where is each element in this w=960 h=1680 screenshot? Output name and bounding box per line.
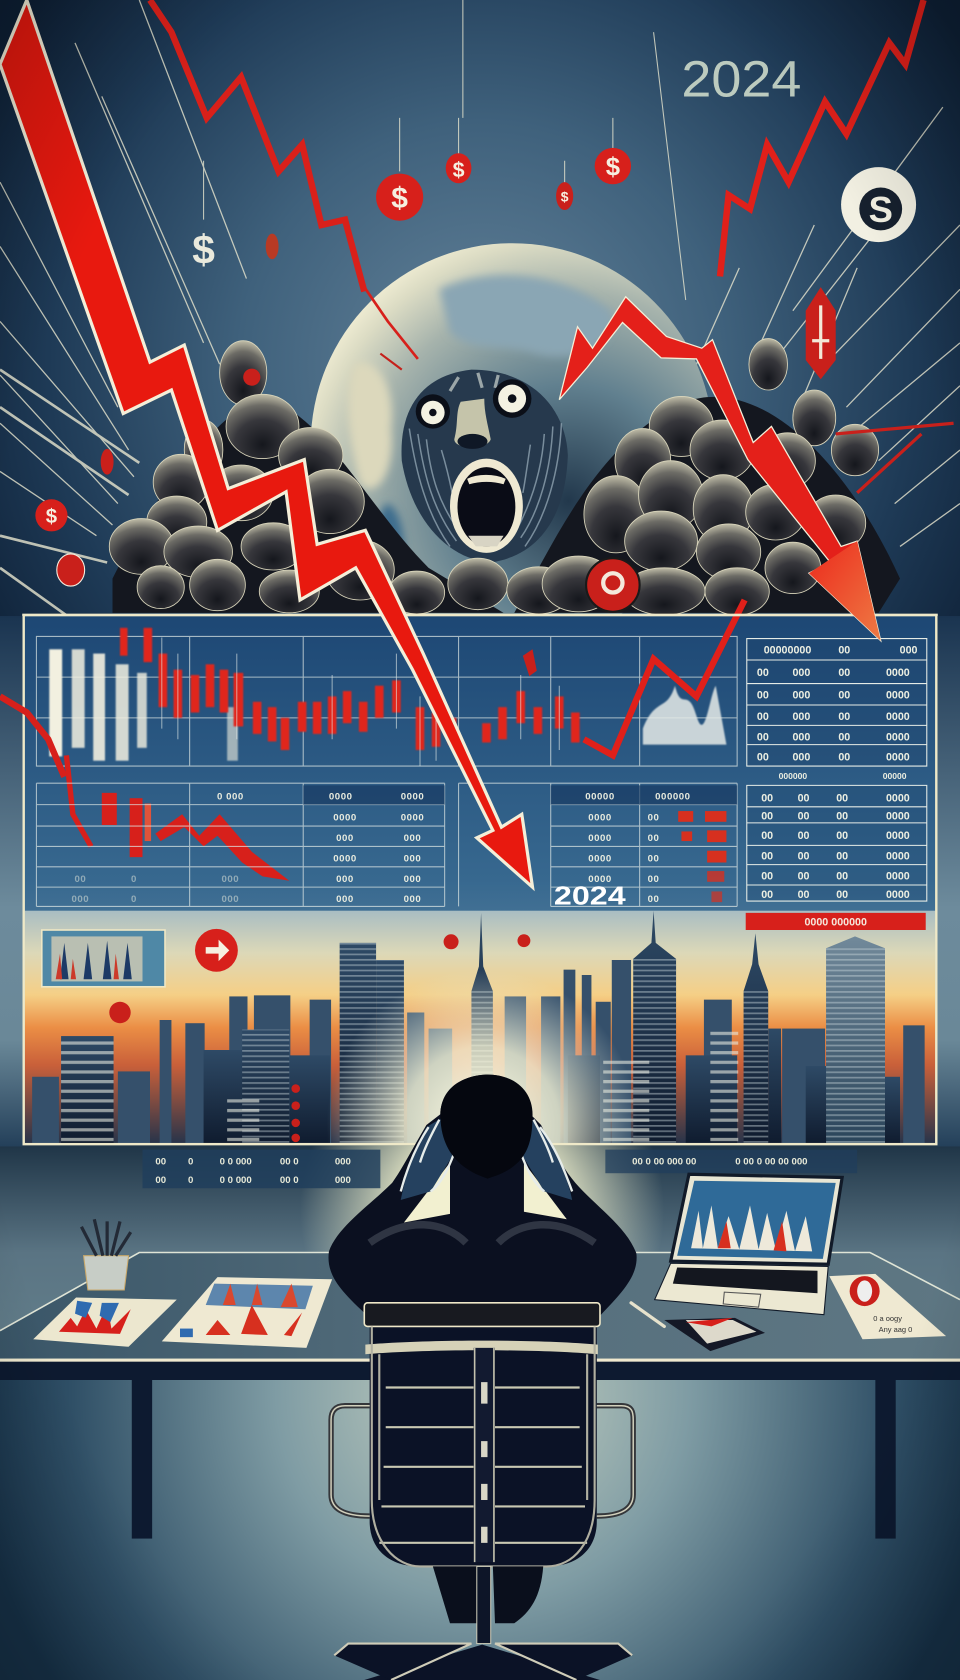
table cell values: 00 [648, 894, 659, 905]
table cell values: 0000 [588, 853, 612, 864]
table cell values [72, 791, 691, 905]
right table bottom: 00 [761, 792, 773, 804]
table cell values: 0 000 [217, 791, 244, 802]
panel year label: 2024 [554, 882, 627, 910]
right table top: 00 [838, 731, 850, 743]
right table top: 0000 [886, 690, 910, 702]
table cell values: 0000 [329, 791, 352, 802]
gap between left arm and neck [404, 1162, 450, 1222]
desk legs [132, 1380, 896, 1539]
chair slats [379, 1388, 587, 1543]
right table bottom: 00 [798, 830, 810, 842]
table cell values: 0000 [333, 813, 357, 824]
chair base struts [334, 1644, 632, 1680]
table cell values: 0000 [401, 791, 424, 802]
chair side frames [372, 1326, 595, 1566]
right forearm and hand [521, 1114, 572, 1200]
data table lower left [36, 783, 445, 906]
paper: red stamp note: 0 a oogy [873, 1314, 902, 1323]
right table bottom: 00 [761, 811, 773, 823]
coin [266, 234, 279, 259]
ticker strip below skyline: 00 0 [280, 1175, 299, 1186]
right side red streak [836, 423, 954, 493]
coin: $ [391, 182, 408, 215]
thin crack in moon [364, 287, 418, 359]
ticker strip below skyline: 00 0 00 000 00 [632, 1157, 696, 1168]
red tag on chart [523, 649, 537, 676]
ticker strip below skyline: 0 [188, 1175, 193, 1186]
red status bar [746, 913, 926, 930]
background sky [0, 0, 960, 616]
table cell values: 000 [72, 894, 89, 905]
chair arm highlights [331, 1406, 633, 1516]
nose [454, 399, 491, 447]
ticker strip below skyline [142, 1150, 857, 1188]
table cell values: 00 [648, 813, 659, 824]
right table top: 00 [757, 667, 769, 679]
paper: charts report [162, 1277, 332, 1348]
table cell values: 000 [336, 894, 354, 905]
white dollar: $ [192, 227, 215, 273]
table cell values: 0000 [588, 813, 612, 824]
right table top: 0000 [886, 731, 910, 743]
side stripes of panel [0, 616, 960, 1146]
hair [440, 1075, 533, 1179]
wide stripes [61, 1029, 738, 1144]
small skyline badges [109, 934, 530, 1023]
laptop [655, 1174, 842, 1315]
paper: red stamp note: Any aag 0 [879, 1325, 912, 1334]
coin [556, 182, 573, 210]
paper: red stamp note [829, 1274, 946, 1339]
table cell values: 0000 [588, 833, 612, 844]
coin [446, 153, 471, 183]
second red crash arrow [559, 297, 881, 641]
large white coin: S [869, 189, 893, 230]
right table top: 00000000 [764, 645, 811, 657]
coin [376, 174, 423, 221]
table cell values: 0000 [588, 874, 612, 885]
right table top: 00 [757, 690, 769, 702]
falling dollar coins [35, 148, 916, 612]
right table bottom: 00 [761, 889, 773, 901]
right table top: 00 [757, 711, 769, 723]
coin: $ [46, 506, 58, 528]
right table bottom: 00 [836, 850, 848, 862]
eye left [416, 394, 450, 429]
far buildings [32, 960, 925, 1144]
large red crash arrow [0, 0, 532, 887]
table cell values: 000 [404, 874, 421, 885]
window stripes [242, 943, 885, 1144]
right table bottom: 000000 [779, 771, 807, 781]
chair rail [365, 1341, 598, 1354]
right table top: 00 [838, 667, 850, 679]
right table top: 000 [792, 690, 810, 702]
chair stem [477, 1566, 491, 1644]
chair center column [474, 1348, 495, 1562]
coin [35, 499, 68, 531]
table cell values: 000 [222, 874, 239, 885]
ticker strip below skyline: 000 [335, 1157, 351, 1168]
ticker strip below skyline: 0 [188, 1157, 193, 1168]
right table bottom: 0000 [886, 792, 910, 804]
table cell values: 00 [648, 833, 659, 844]
table cell values: 000 [404, 833, 421, 844]
right table bottom: 00 [836, 889, 848, 901]
ticker strip below skyline: 00 0 [280, 1157, 299, 1168]
right table top: 0000 [886, 667, 910, 679]
clouds [109, 339, 900, 615]
table dark header [303, 785, 445, 805]
arrow badge [195, 929, 238, 972]
table cell values: 00000 [585, 791, 615, 802]
table cell values: 00 [74, 874, 86, 885]
thin red zigzag top right [720, 0, 924, 276]
right table top: 000 [792, 711, 810, 723]
right table top: 000 [900, 645, 918, 657]
table cell values: 000 [336, 833, 354, 844]
large white coin [841, 167, 916, 242]
ticker strip below skyline: 0 0 000 [220, 1157, 252, 1168]
shoulder shading [370, 1225, 595, 1243]
legs and shoes [433, 1566, 543, 1623]
wall glow [300, 1145, 664, 1360]
ticker strip below skyline: 0 0 000 [220, 1175, 252, 1186]
light tower [826, 936, 885, 1144]
chair arms [331, 1406, 633, 1516]
right table bottom: 00 [836, 811, 848, 823]
right table top: 00 [838, 711, 850, 723]
right table bottom: 0000 [886, 850, 910, 862]
table dark header [551, 785, 737, 805]
white mountain chart [643, 686, 726, 745]
table cell values: 000 [222, 894, 239, 905]
face wrinkles [409, 373, 561, 546]
data table lower middle [459, 783, 737, 906]
left forearm and hand [401, 1114, 454, 1200]
table cell values: 00 [648, 874, 659, 885]
eye right [493, 379, 531, 418]
coin [57, 554, 85, 586]
right table bottom: 0000 [886, 830, 910, 842]
table cell values: 000 [404, 894, 421, 905]
right table bottom: 00 [761, 850, 773, 862]
right table top: 00 [838, 690, 850, 702]
right table top: 00 [757, 731, 769, 743]
lower wall [0, 1145, 960, 1361]
right table top: 000 [792, 752, 810, 764]
worried person [328, 1075, 637, 1316]
right table bottom [747, 771, 927, 901]
hand outlines [401, 1120, 572, 1191]
year label top: 2024 [681, 49, 801, 107]
thin red zigzag top [150, 0, 364, 291]
table cell values: 000000 [655, 791, 691, 802]
right table bottom: 00 [836, 792, 848, 804]
ticker strip below skyline: 00 [155, 1175, 166, 1186]
right table top: 000 [792, 731, 810, 743]
right table bottom: 00 [761, 830, 773, 842]
coin: $ [561, 188, 569, 204]
candle wicks [162, 638, 559, 766]
gap between right arm and neck [524, 1162, 567, 1219]
skyline buildings [32, 911, 925, 1144]
red line on panel [584, 600, 745, 755]
near buildings [61, 911, 900, 1144]
table cell values: 000 [404, 853, 421, 864]
right table top [747, 639, 927, 766]
paper: red and blue chart [33, 1298, 177, 1347]
right table bottom: 00 [798, 871, 810, 883]
floor [0, 1380, 960, 1680]
coin [595, 148, 631, 184]
right table bottom: 00000 [883, 771, 907, 781]
dashboard panel [24, 600, 936, 1144]
red status bar: 0000 000000 [804, 917, 867, 929]
small red falling chart [66, 755, 289, 881]
moon continents [348, 275, 612, 584]
coin: $ [453, 158, 465, 182]
table cell values: 000 [336, 874, 354, 885]
skyline sunset backdrop [25, 911, 935, 1144]
table cell values: 0000 [401, 813, 424, 824]
chair back panel [370, 1326, 597, 1566]
screaming face [402, 370, 568, 562]
radiating speed lines [0, 0, 960, 621]
mouth [450, 459, 523, 553]
red line entering the panel from the left [0, 696, 64, 777]
coin [101, 449, 114, 475]
small bar chart card [42, 930, 165, 987]
body silhouette [328, 1075, 637, 1316]
right table top: 0000 [886, 711, 910, 723]
notebook [664, 1318, 765, 1351]
chair base [364, 1645, 600, 1680]
right table bottom: 00 [836, 830, 848, 842]
coin: $ [606, 154, 620, 182]
pencil cup [81, 1219, 131, 1290]
cloud coin [586, 558, 640, 612]
table cell values: 00 [648, 853, 659, 864]
right table bottom: 00 [798, 850, 810, 862]
right table top: 000 [792, 667, 810, 679]
table cell values: 0 [131, 894, 137, 905]
right table bottom: 0000 [886, 811, 910, 823]
right table bottom: 00 [798, 811, 810, 823]
right table top: 00 [838, 752, 850, 764]
red windows [291, 1084, 300, 1142]
candlesticks [120, 628, 580, 750]
office chair [331, 1303, 633, 1680]
chair top cushion [364, 1303, 600, 1326]
pen [631, 1303, 664, 1326]
red table cells [678, 811, 726, 902]
right table bottom: 00 [836, 871, 848, 883]
coin [243, 369, 260, 386]
ticker strip below skyline: 0 00 0 00 00 000 [735, 1157, 808, 1168]
right table top: 00 [838, 645, 850, 657]
table cell values: 0000 [333, 853, 357, 864]
right table top: 0000 [886, 752, 910, 764]
ticker strip below skyline: 00 [155, 1157, 166, 1168]
ticker strip below skyline: 000 [335, 1175, 351, 1186]
panel frame [24, 615, 936, 1144]
right table bottom: 0000 [886, 889, 910, 901]
right table top: 00 [757, 752, 769, 764]
white volume bars [49, 649, 238, 761]
right table bottom: 00 [798, 889, 810, 901]
price tag [806, 287, 836, 379]
city glow behind person [321, 964, 643, 1144]
table cell values: 0 [131, 874, 137, 885]
right table bottom: 00 [761, 871, 773, 883]
desk [0, 1252, 960, 1380]
moon [311, 243, 714, 646]
right table bottom: 0000 [886, 871, 910, 883]
chart grid [36, 636, 737, 766]
right table bottom: 00 [798, 792, 810, 804]
